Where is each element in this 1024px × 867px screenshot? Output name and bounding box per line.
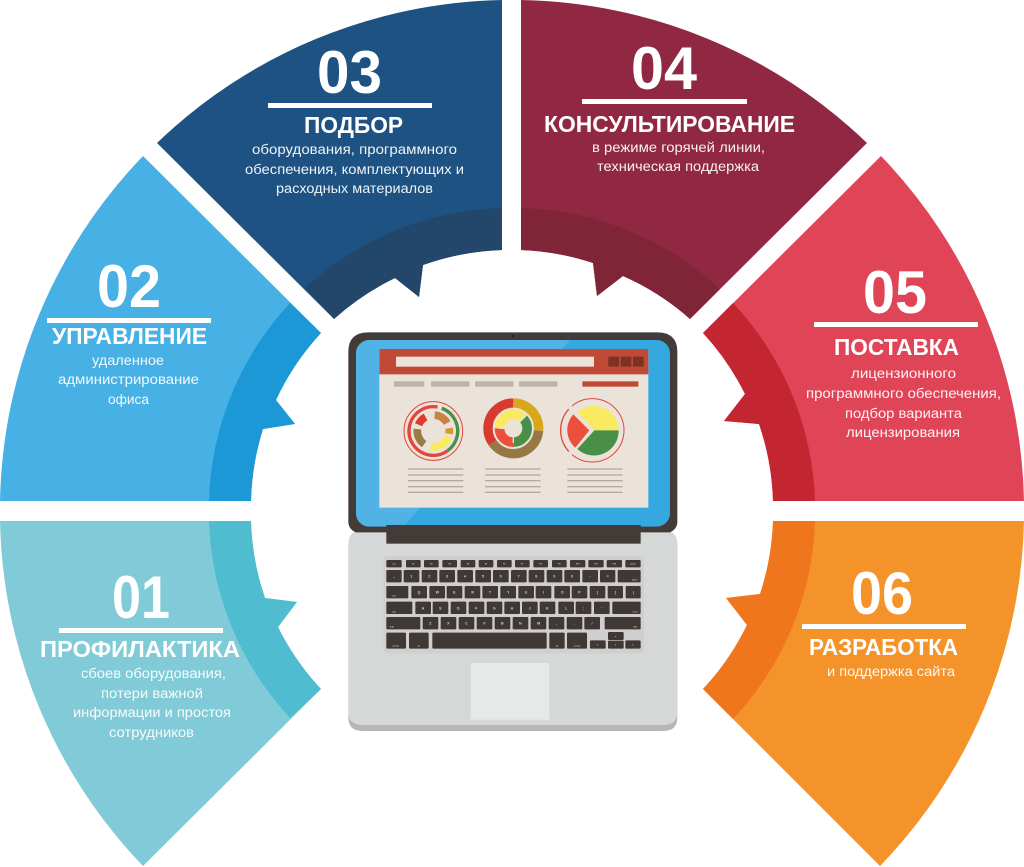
keyboard well	[383, 556, 644, 653]
keyboard keys: ◄	[596, 644, 598, 647]
keyboard keys: N	[519, 622, 522, 626]
keyboard keys: |	[633, 591, 634, 595]
keyboard keys: 1	[410, 575, 412, 579]
keyboard keys: F7	[521, 564, 524, 566]
keyboard keys: 3	[446, 575, 448, 579]
description 05: подбор варианта	[845, 406, 963, 421]
display	[356, 340, 670, 527]
segment 05 background	[703, 156, 1024, 501]
heading 06: РАЗРАБОТКА	[809, 634, 958, 660]
keyboard keys: '	[601, 606, 602, 610]
keyboard keys: H	[511, 606, 514, 610]
description 05: лицензирования	[846, 425, 960, 440]
keyboard keys: ►	[632, 644, 634, 647]
keyboard keys: alt	[418, 644, 420, 647]
keyboard keys: ]	[615, 591, 617, 595]
keyboard keys: ~	[393, 575, 395, 579]
description 01	[73, 666, 231, 740]
rule 06	[802, 624, 966, 629]
keyboard keys: shift	[390, 626, 394, 629]
number 06: 06	[851, 560, 913, 627]
keyboard keys: ,	[556, 622, 557, 626]
keyboard keys: P	[578, 591, 581, 595]
segment 02 background	[0, 156, 321, 501]
keyboard keys: F8	[540, 564, 543, 566]
panel 03: подбор	[157, 0, 502, 319]
keyboard keys: A	[422, 606, 425, 610]
web page window	[379, 349, 648, 508]
search bar	[396, 357, 594, 367]
keyboard keys: =	[607, 575, 609, 579]
keyboard keys: F12	[613, 564, 617, 566]
keyboard keys: ;	[583, 606, 584, 610]
keyboard keys: I	[543, 591, 544, 595]
keyboard keys: E	[453, 591, 456, 595]
keyboard keys: .	[574, 622, 575, 626]
description 05: лицензионного	[851, 366, 956, 381]
keyboard keys: control	[574, 644, 581, 647]
keyboard keys: K	[546, 606, 549, 610]
description 05: программного обеспечения,	[806, 386, 1001, 401]
keyboard keys: R	[471, 591, 474, 595]
chart: exploded pie	[548, 386, 637, 475]
keyboard keys: F10	[576, 564, 580, 566]
number 04: 04	[631, 35, 698, 102]
keyboard keys: U	[525, 591, 528, 595]
segment 06 inner band	[703, 521, 815, 719]
chart: double donut	[479, 394, 548, 463]
keyboard keys: -	[589, 575, 591, 579]
keyboard keys: esc	[392, 564, 397, 566]
keyboard keys: ▲	[615, 635, 617, 638]
description 03: оборудования, программного	[252, 142, 457, 157]
description 04: техническая поддержка	[597, 159, 760, 174]
heading 04: КОНСУЛЬТИРОВАНИЕ	[544, 111, 795, 137]
keyboard keys: delete	[632, 578, 638, 581]
keyboard keys: 7	[518, 575, 520, 579]
number 05: 05	[863, 259, 927, 326]
description 01: потери важной	[101, 686, 203, 701]
laptop illustration	[348, 332, 677, 731]
rule 03	[268, 103, 432, 108]
keyboard keys: 2	[428, 575, 430, 579]
keyboard keys: V	[483, 622, 486, 626]
description 01: сотрудников	[109, 725, 194, 740]
keyboard keys: alt	[556, 644, 558, 647]
segment 06 background	[703, 521, 1024, 866]
segment 01 background	[0, 521, 321, 866]
laptop screen	[348, 332, 677, 544]
segment 05 inner band	[703, 303, 815, 501]
panel 04: консультирование	[521, 0, 867, 319]
keyboard keys: 4	[464, 575, 467, 579]
panel 05: поставка	[703, 156, 1024, 501]
rule 01	[59, 628, 223, 633]
keyboard keys: D	[457, 606, 460, 610]
keyboard keys: power	[630, 563, 636, 566]
panel 01: профилактика	[0, 521, 321, 866]
window buttons	[608, 357, 644, 367]
keyboard keys: F2	[430, 564, 433, 566]
keyboard keys: F9	[558, 564, 561, 566]
keyboard keys: F5	[485, 564, 488, 566]
keyboard keys: Q	[418, 591, 421, 595]
keyboard keys: T	[489, 591, 492, 595]
webcam	[512, 335, 514, 337]
description 01: сбоев оборудования,	[81, 666, 226, 681]
keyboard keys: W	[436, 591, 440, 595]
heading 03: ПОДБОР	[304, 112, 403, 138]
laptop base	[348, 530, 677, 731]
heading 05: ПОСТАВКА	[834, 334, 959, 360]
number 02: 02	[97, 253, 161, 320]
keyboard keys: control	[392, 644, 399, 647]
description 02: администрирование	[58, 372, 199, 387]
keyboard keys: Y	[507, 591, 510, 595]
window header	[379, 349, 648, 374]
description 04	[592, 140, 765, 174]
description 04: в режиме горячей линии,	[592, 140, 765, 155]
chart: ring segments	[399, 397, 467, 465]
segment 01 inner band	[209, 521, 321, 718]
trackpad	[471, 663, 549, 720]
keyboard keys: 8	[535, 575, 537, 579]
bezel	[348, 332, 677, 532]
keyboard keys: ▼	[615, 644, 617, 647]
rule 04	[582, 99, 747, 104]
active nav bar	[582, 381, 638, 387]
hinge	[386, 525, 641, 544]
keyboard keys: F6	[503, 564, 506, 566]
segment 02 inner band	[209, 303, 321, 501]
keyboard keys: 5	[482, 575, 484, 579]
description 03	[245, 142, 464, 196]
rule 05	[814, 322, 978, 327]
heading 01: ПРОФИЛАКТИКА	[40, 636, 240, 662]
keyboard keys: S	[439, 606, 442, 610]
segment 03 background	[157, 0, 502, 319]
panel 02: управление	[0, 156, 321, 501]
keyboard keys: 0	[571, 575, 573, 579]
keyboard keys: shift	[633, 626, 637, 629]
keyboard keys: [	[597, 591, 599, 595]
keyboard keys: caps	[392, 611, 397, 613]
keyboard keys: M	[537, 622, 540, 626]
keyboard keys: return	[632, 610, 639, 613]
keyboard keys: X	[447, 622, 450, 626]
keyboard keys: 6	[500, 575, 502, 579]
description 02	[58, 353, 199, 407]
nav bars	[394, 381, 557, 387]
keyboard keys: F	[475, 606, 478, 610]
keyboard keys: tab	[393, 595, 396, 598]
number 01: 01	[112, 564, 170, 631]
rule 02	[47, 318, 211, 323]
keyboard keys: F1	[412, 564, 415, 566]
segment 03 inner band	[305, 208, 502, 319]
description 02: удаленное	[92, 353, 164, 368]
description 02: офиса	[108, 392, 149, 407]
segment 04 background	[521, 0, 867, 319]
keyboard keys: 9	[553, 575, 555, 579]
description 05	[806, 366, 1001, 440]
keyboard keys: F11	[594, 564, 599, 566]
keyboard keys	[386, 560, 641, 649]
keyboard keys: B	[501, 622, 504, 626]
keyboard keys: O	[561, 591, 564, 595]
panel 06: разработка	[703, 521, 1024, 866]
description 01: информации и простоя	[73, 705, 231, 720]
keyboard keys: J	[529, 606, 531, 610]
keyboard keys: L	[565, 606, 568, 610]
keyboard keys: /	[591, 622, 593, 626]
heading 02: УПРАВЛЕНИЕ	[52, 323, 207, 349]
number 03: 03	[317, 39, 382, 106]
description 03: расходных материалов	[276, 181, 433, 196]
chart captions	[408, 468, 623, 493]
keyboard keys: G	[493, 606, 496, 610]
keyboard keys: F3	[449, 564, 452, 566]
keyboard keys: C	[465, 622, 468, 626]
keyboard keys: F4	[467, 563, 470, 566]
keyboard keys: Z	[429, 622, 432, 626]
description 06: и поддержка сайта	[827, 664, 956, 679]
description 03: обеспечения, комплектующих и	[245, 162, 464, 177]
segment 04 inner band	[521, 208, 720, 319]
